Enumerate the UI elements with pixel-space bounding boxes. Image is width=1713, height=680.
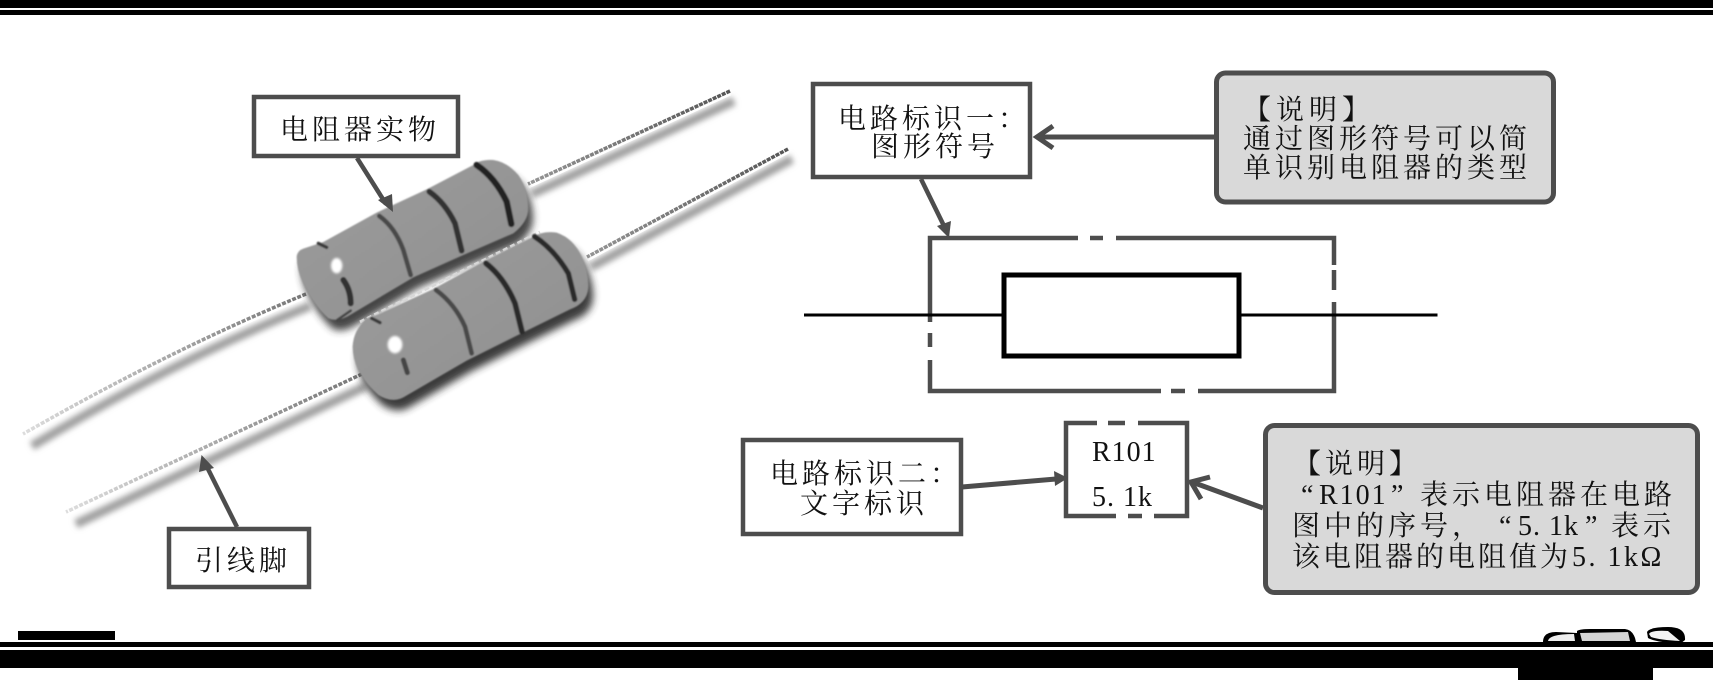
callout: explanation two: 5. 1k xyxy=(1518,511,1579,542)
label: circuit mark two: 电路标识二： xyxy=(770,458,962,490)
text mark: R101 5.1k: 5. 1k xyxy=(1092,482,1153,513)
callout: explanation two: ” xyxy=(1585,511,1597,542)
dashed outline xyxy=(930,238,1334,391)
arrow: callout to text mark xyxy=(1191,477,1263,508)
callout: explanation two xyxy=(1266,426,1698,592)
bottom rule and tab xyxy=(0,631,1713,680)
label: lead pin: 引线脚 xyxy=(195,545,291,577)
photo: two resistors xyxy=(23,91,792,524)
text mark: R101 5.1k: R101 xyxy=(1092,437,1157,468)
label: resistor photo: 电阻器实物 xyxy=(280,114,440,146)
callout: explanation two: 5. 1kΩ xyxy=(1572,542,1664,573)
callout: explanation two: 图中的序号， xyxy=(1292,510,1484,542)
resistor rectangle xyxy=(1004,275,1239,356)
resistor: rear xyxy=(297,160,533,330)
label: circuit mark one: 电路标识一： xyxy=(838,103,1030,135)
callout: explanation one: 单识别电阻器的类型 xyxy=(1243,152,1531,184)
label: circuit mark one xyxy=(813,84,1030,177)
label: lead pin xyxy=(169,529,309,587)
symbol: resistor graphic xyxy=(804,238,1438,391)
callout: explanation two: 【说明】 xyxy=(1293,448,1421,480)
arrow: mark one to symbol xyxy=(921,179,951,238)
callout: explanation two: “ xyxy=(1301,480,1313,511)
callout: explanation two: “ xyxy=(1499,511,1511,542)
arrow: to lead pin xyxy=(199,455,237,527)
arrow: callout to mark one xyxy=(1037,126,1214,148)
label: circuit mark one: 图形符号 xyxy=(871,131,999,163)
callout: explanation two: R101 xyxy=(1319,480,1388,511)
text mark: R101 5.1k xyxy=(1066,423,1187,516)
callout: explanation two: ” xyxy=(1391,480,1403,511)
resistor: front xyxy=(353,232,593,411)
label: resistor photo xyxy=(254,97,458,156)
icon: small resistor xyxy=(1543,627,1685,644)
label: circuit mark two: 文字标识 xyxy=(800,488,928,520)
wire shadows xyxy=(32,101,792,524)
lead lines xyxy=(804,314,1438,316)
resistor leads xyxy=(23,91,788,514)
callout: explanation two: 表示 xyxy=(1611,510,1675,542)
callout: explanation one: 【说明】 xyxy=(1243,94,1375,126)
callout: explanation two: 表示电阻器在电路 xyxy=(1420,479,1676,511)
gap glow between resistors xyxy=(360,232,540,322)
arrow: mark two to text mark xyxy=(962,471,1068,487)
top double rule xyxy=(0,0,1713,15)
arrow: to resistor body xyxy=(357,158,393,212)
callout: explanation one xyxy=(1216,73,1554,202)
callout: explanation one: 通过图形符号可以简 xyxy=(1243,123,1531,155)
label: circuit mark two xyxy=(743,440,962,534)
callout: explanation two: 该电阻器的电阻值为 xyxy=(1292,541,1571,573)
